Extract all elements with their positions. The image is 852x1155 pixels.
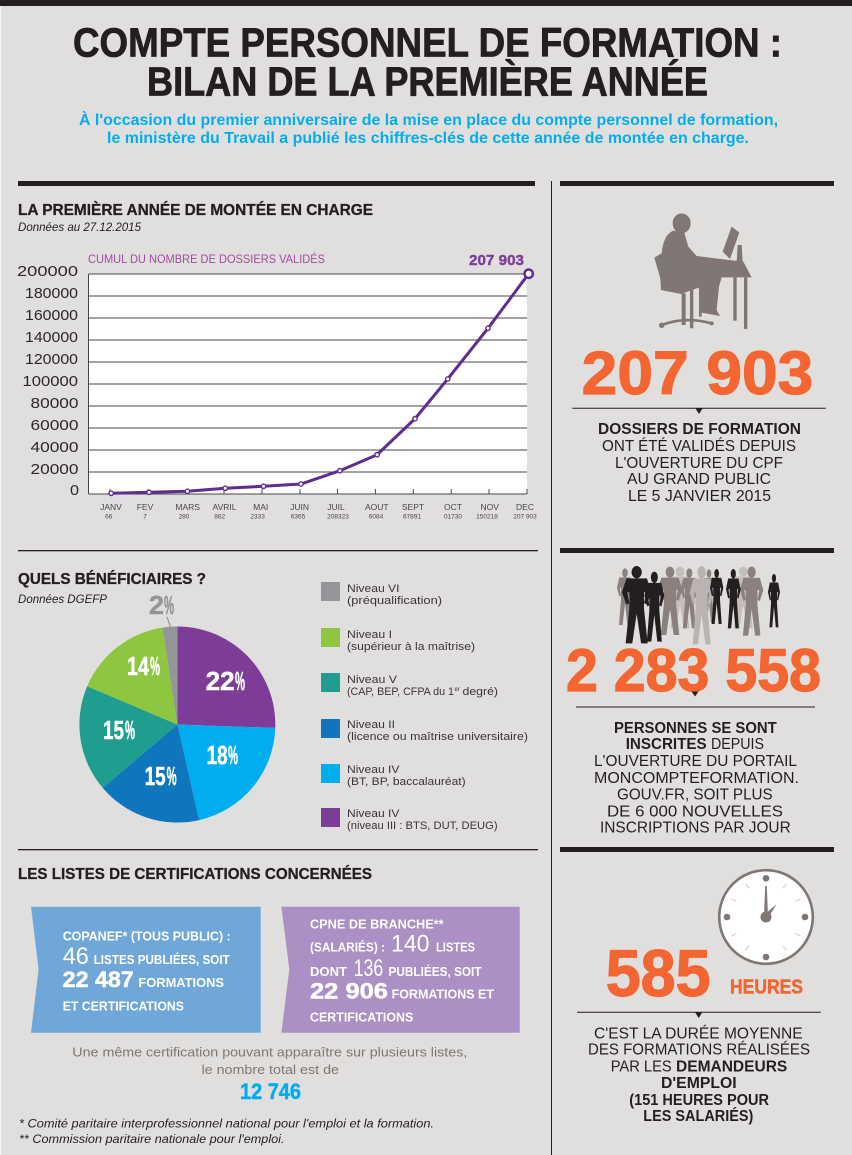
pie chart: % [125,715,135,745]
total note: le nombre total est de [202,1062,339,1077]
text: training hours: DES FORMATIONS RÉALISÉES [588,1042,810,1059]
big number: 585 hours: HEURES [730,976,803,998]
legend: (BT, BP, baccalauréat) [347,776,466,788]
total note: Une même certification pouvant apparaître sur plusieurs listes, [72,1045,467,1060]
legend: Niveau I [347,629,392,641]
x axis labels: 2333 [250,514,265,520]
x axis labels: 280 [179,514,190,520]
text: registered people: MONCOMPTEFORMATION. [594,770,799,787]
panel: validated files [572,213,826,505]
y axis labels: 40000 [30,439,78,456]
data line [109,270,533,495]
total note: 12 746 [240,1079,301,1104]
pie chart: 15 [103,715,124,745]
legend: (niveau III : BTS, DUT, DEUG) [347,820,498,832]
x axis labels: DEC [516,502,534,512]
y axis labels [17,263,79,499]
icon: person at desk [654,213,752,329]
text: training hours: DEMANDEURS [676,1058,787,1075]
x axis labels: MARS [175,502,200,512]
footnotes [19,1117,434,1146]
legend: Niveau V [347,674,398,686]
text: registered people: PERSONNES SE SONT [614,720,777,737]
big number: 2 283 558: 2 283 558 [566,637,821,704]
chart title: CUMUL DU NOMBRE DE DOSSIERS VALIDÉS [88,251,325,266]
subtitle: À l'occasion du premier anniversaire de la mise en place du compte personnel de formation, [79,110,778,129]
title [73,20,782,104]
pie chart: % [235,666,245,696]
callout: CPNE: CERTIFICATIONS [310,1011,413,1025]
total note [72,1045,467,1104]
legend: er [454,687,460,693]
callout: COPANEF: LISTES PUBLIÉES, SOIT [94,952,230,967]
x axis labels: NOV [480,502,499,512]
icon: clock [719,870,813,964]
y axis labels: 100000 [22,373,78,390]
text: validated files [598,421,801,505]
callout: CPNE: FORMATIONS ET [392,987,494,1001]
x axis labels: FEV [137,502,154,512]
legend: (CAP, BEP, CFPA du 1 [347,686,454,698]
panel: beneficiaries [18,569,528,832]
x axis labels: 6365 [291,514,306,520]
text: registered people: DEPUIS [711,736,764,753]
x axis labels: 66 [105,514,113,520]
text: registered people: INSCRITES [626,736,707,753]
pie chart [79,590,275,823]
legend: degré) [462,686,498,698]
callout: CPNE: PUBLIÉES, SOIT [388,964,482,979]
callout: CPNE: 136 [354,955,383,982]
text: validated files: AU GRAND PUBLIC [627,471,771,488]
pie chart: 18 [207,740,228,770]
chart final value: 207 903 [469,252,524,269]
legend [321,582,528,832]
callout: COPANEF [31,907,261,1033]
callout: CPNE: 22 906 [310,978,388,1003]
heading: certification lists: LES LISTES DE CERTIFICATIONS CONCERNÉES [18,864,372,883]
x axis labels: 862 [214,514,226,520]
text: validated files: LE 5 JANVIER 2015 [628,488,771,505]
panel: training hours [577,870,821,1125]
x axis labels: MAI [253,502,268,512]
x axis labels: JANV [100,502,122,512]
pie chart: 14 [127,651,149,681]
y axis labels: 160000 [25,307,78,324]
pie chart: 22 [206,666,235,696]
text: validated files: DOSSIERS DE FORMATION [598,421,801,438]
legend: Niveau IV [347,764,400,776]
pie chart: 15 [145,761,166,791]
text: registered people: DE 6 000 NOUVELLES [607,804,783,820]
callout: COPANEF: COPANEF* (TOUS PUBLIC) : [63,930,231,944]
x axis labels: 150218 [476,514,498,520]
x axis labels: SEPT [402,502,424,512]
y axis labels: 200000 [17,263,78,280]
y axis labels: 60000 [30,417,78,434]
big number: 585 hours: 585 [606,936,711,1010]
y axis labels: 120000 [25,351,78,368]
x axis labels: OCT [444,502,462,512]
x axis labels: 7 [143,514,147,520]
callout: COPANEF: FORMATIONS [138,976,224,990]
subtitle [79,110,778,147]
text: registered people [594,720,799,836]
date note: Données au 27.12.2015 [18,222,142,234]
panel: certification lists [18,864,520,1146]
footnotes: * Comité paritaire interprofessionnel national pour l'emploi et la formation. [19,1117,434,1131]
x axis labels: AOUT [365,502,389,512]
text: training hours: PAR LES [611,1058,672,1075]
callout: COPANEF: 46 [63,943,89,970]
text: training hours [588,1026,810,1125]
y axis labels: 20000 [30,461,78,478]
pie chart: 2 [149,590,164,620]
icon: crowd [617,566,780,644]
x axis labels: JUIN [290,502,309,512]
callout: COPANEF: ET CERTIFICATIONS [63,1000,184,1014]
title: COMPTE PERSONNEL DE FORMATION : [73,20,782,66]
source note: Données DGEFP [18,594,107,606]
panel: first year [17,200,537,520]
x axis labels: JUIL [327,502,345,512]
y axis labels: 0 [70,482,79,499]
footnotes: ** Commission paritaire nationale pour l'emploi. [19,1132,284,1146]
x axis labels: 01730 [444,514,462,520]
big number: 207 903: 207 903 [582,339,813,407]
legend: (licence ou maîtrise universitaire) [347,731,528,743]
text: registered people: INSCRIPTIONS PAR JOUR [600,820,791,836]
y axis labels: 180000 [25,285,78,302]
pie chart: % [228,740,238,770]
callout: CPNE: 140 [391,931,430,958]
title: BILAN DE LA PREMIÈRE ANNÉE [147,58,708,104]
callout: CPNE: DONT [310,965,347,979]
pie chart: % [167,761,177,791]
subtitle: le ministère du Travail a publié les chiffres-clés de cette année de montée en charge. [107,130,749,147]
legend: Niveau II [347,719,395,731]
callout: CPNE: CPNE DE BRANCHE** [310,918,444,932]
text: validated files: L'OUVERTURE DU CPF [615,455,783,472]
legend: Niveau IV [347,808,400,820]
callout: COPANEF: 22 487 [63,967,134,992]
y axis labels: 80000 [30,395,78,412]
legend: (préqualification) [347,595,442,607]
line chart [17,251,537,520]
heading: beneficiaries: QUELS BÉNÉFICIAIRES ? [18,569,206,588]
x axis labels: 67891 [403,514,421,520]
pie chart: % [164,590,174,620]
legend: Niveau VI [347,583,400,595]
text: registered people: L'OUVERTURE DU PORTAIL [594,753,797,770]
x axis labels: 208323 [327,514,349,520]
big number: 585 hours [606,936,803,1010]
text: training hours: (151 HEURES POUR [629,1092,769,1109]
text: training hours: C'EST LA DURÉE MOYENNE [594,1026,803,1043]
text: registered people: GOUV.FR, SOIT PLUS [617,786,773,804]
y axis labels: 140000 [25,329,78,346]
legend: (supérieur à la maîtrise) [347,641,475,653]
x axis labels [100,502,537,520]
text: validated files: ONT ÉTÉ VALIDÉS DEPUIS [602,438,796,455]
heading: first year: LA PREMIÈRE ANNÉE DE MONTÉE EN CHARGE [18,200,373,219]
text: training hours: D'EMPLOI [661,1075,737,1092]
pie chart: % [150,651,160,681]
text: training hours: LES SALARIÉS) [643,1108,753,1125]
x axis labels: 6084 [369,514,384,520]
panel: registered people [566,566,821,836]
callout: CPNE [281,907,520,1033]
x axis labels: 207 903 [513,514,537,520]
x axis labels: AVRIL [213,502,237,512]
callout: CPNE: LISTES [436,941,475,955]
callout: CPNE: (SALARIÉS) : [310,940,385,955]
